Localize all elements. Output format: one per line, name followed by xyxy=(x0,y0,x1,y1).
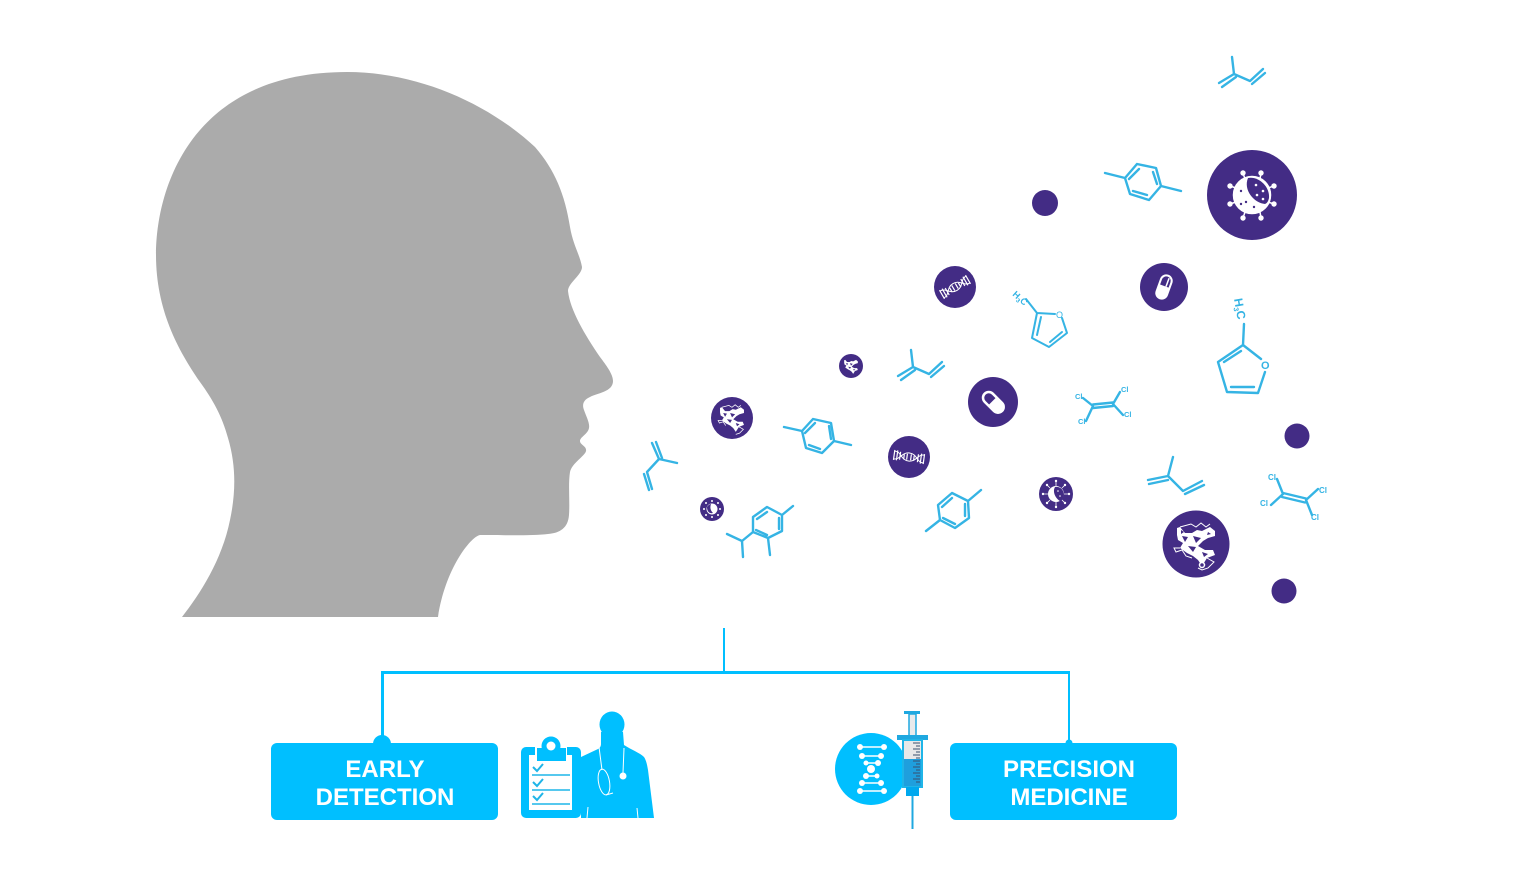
molecule: tetrachloroethylene small: Cl xyxy=(1124,410,1132,419)
molecule: methylfuran small xyxy=(1009,289,1067,347)
icon: clipboard and doctor xyxy=(521,712,654,818)
icon: DNA circle xyxy=(835,733,907,805)
molecule: tetrachloroethylene small xyxy=(1075,385,1132,426)
box: precision medicine: MEDICINE xyxy=(1010,784,1128,811)
molecule: methylfuran small: H xyxy=(1011,289,1022,301)
molecule: methylfuran large xyxy=(1218,297,1270,393)
molecule: tetrachloroethylene large: Cl xyxy=(1311,513,1319,522)
molecule: tetrachloroethylene small: Cl xyxy=(1075,392,1082,401)
molecule: methylfuran small: 3 xyxy=(1014,298,1021,305)
molecule: isoprene middle xyxy=(898,350,944,380)
molecule: isoprene top right xyxy=(1219,57,1265,87)
dot: top xyxy=(1032,190,1058,216)
dot: right middle xyxy=(1284,424,1310,448)
connector lines xyxy=(373,628,1072,753)
molecule: tetrachloroethylene large: Cl xyxy=(1260,499,1268,508)
molecule: tetrachloroethylene large: Cl xyxy=(1319,486,1327,495)
molecule: isoprene left xyxy=(644,442,677,490)
particle: DNA lower xyxy=(888,436,930,478)
icon: DNA and syringe xyxy=(835,711,928,829)
box: early detection: DETECTION xyxy=(316,784,454,811)
molecule: methylfuran large: H xyxy=(1231,297,1246,308)
molecule: tetrachloroethylene large xyxy=(1260,473,1327,522)
molecule: tetrachloroethylene large: Cl xyxy=(1268,473,1276,482)
box: early detection xyxy=(271,743,498,820)
molecule: tetrachloroethylene small: Cl xyxy=(1121,385,1128,394)
molecule: tetrachloroethylene small: Cl xyxy=(1078,417,1086,426)
molecule: methylfuran small: C xyxy=(1018,296,1030,308)
molecule: isoprene right xyxy=(1148,457,1204,494)
molecule: xylene middle xyxy=(784,419,851,453)
particle: small virus xyxy=(1039,477,1073,511)
head silhouette xyxy=(156,72,613,617)
icon: syringe xyxy=(897,711,928,829)
particle: small protein xyxy=(839,354,863,378)
molecule: xylene lower xyxy=(926,490,981,531)
particle: tiny virus xyxy=(700,497,724,521)
molecule: methylfuran large: 3 xyxy=(1232,307,1239,312)
molecule: methylfuran large: O xyxy=(1261,360,1270,372)
box: early detection: EARLY xyxy=(345,756,425,783)
particle: medium protein xyxy=(711,397,753,439)
molecule: methylfuran small: O xyxy=(1056,310,1063,320)
particle: large virus xyxy=(1207,150,1297,240)
particle: pill lower xyxy=(968,377,1018,427)
molecule: methylfuran large: C xyxy=(1233,309,1249,321)
icon: clipboard xyxy=(521,736,581,818)
box: precision medicine xyxy=(950,743,1177,820)
particle: DNA upper xyxy=(934,266,976,308)
box: precision medicine: PRECISION xyxy=(1003,756,1135,783)
dot: bottom xyxy=(1272,578,1296,604)
molecule: cymene xyxy=(727,506,793,557)
particle: large protein xyxy=(1162,510,1230,578)
particle: pill upper xyxy=(1140,263,1188,311)
icon: doctor xyxy=(581,712,654,818)
molecule: xylene top right xyxy=(1105,164,1181,200)
